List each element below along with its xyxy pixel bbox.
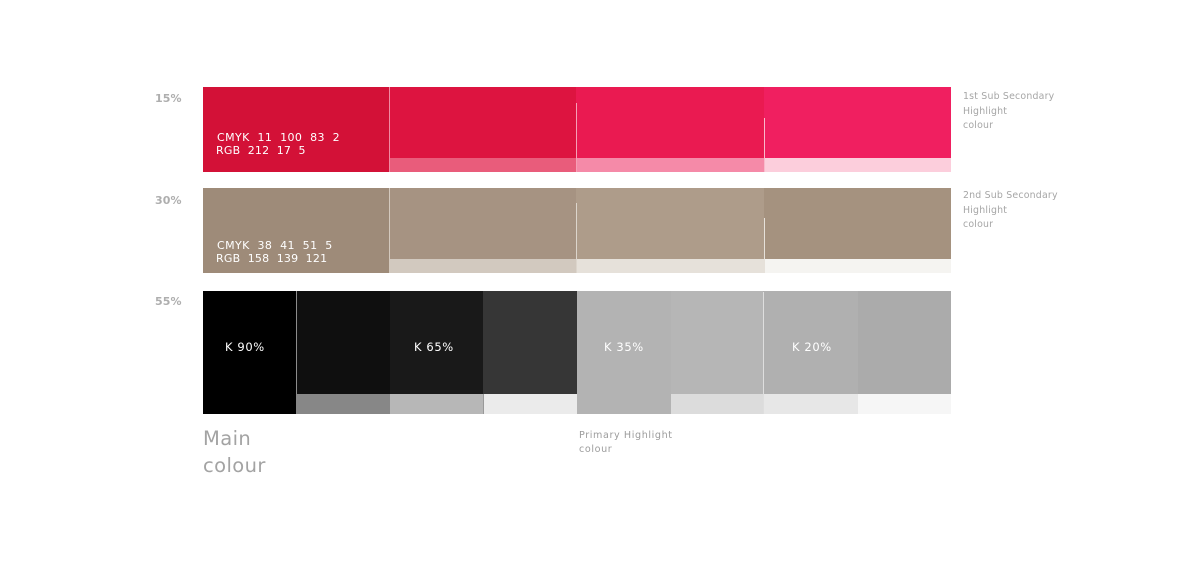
swatch: red tint 2 [576,87,764,172]
caption: 2nd sub secondary highlight colour: 2nd Sub Secondary [963,190,1058,201]
swatch: K 90% tint [296,291,390,394]
text: taupe RGB values: RGB 158 139 121 [216,252,327,265]
band: red light 3 [764,158,951,172]
band: taupe light 3 [764,259,951,273]
band: K 65% light [483,394,577,414]
band: K 20% mid [763,394,858,414]
swatch: K 35% tint [671,291,763,394]
swatch: K 65% [390,291,483,394]
text: taupe CMYK values: CMYK 38 41 51 5 [217,239,333,252]
heading: main colour: colour [203,454,266,477]
caption: 1st sub secondary highlight colour: colour [963,120,993,131]
label: 30%: 30% [155,194,182,207]
swatch: K 35% [577,291,671,414]
swatch: red tint 3 [764,87,951,172]
heading: main colour: Main [203,427,251,450]
caption: primary highlight colour [579,430,673,455]
band: K 20% light [858,394,951,414]
band: K 90% light [296,394,390,414]
panel: taupe swatch row [203,188,951,273]
label: 55%: 55% [155,295,182,308]
text: K 20%: K 20% [792,340,832,354]
caption: 2nd sub secondary highlight colour: Highlight [963,204,1007,216]
text: K 90%: K 90% [225,340,265,354]
text: red RGB values: RGB 212 17 5 [216,144,306,157]
band: K 35% light [671,394,763,414]
swatch: red tint 1 [389,87,576,172]
caption: 1st sub secondary highlight colour: 1st Sub Secondary [963,91,1054,102]
band: taupe light 1 [389,259,576,273]
swatch: K 90% [203,291,296,414]
panel: red swatch row [203,87,951,172]
caption: 2nd sub secondary highlight colour [963,190,1058,230]
label: 15%: 15% [155,92,182,105]
panel: greyscale swatch row [203,291,951,414]
band: K 65% mid [390,394,483,414]
swatch: taupe tint 2 [576,188,764,273]
band: red light 2 [576,158,764,172]
swatch: base taupe [203,188,389,273]
swatch: taupe tint 1 [389,188,576,273]
band: taupe light 2 [576,259,764,273]
heading: main colour [203,427,266,477]
swatch: K 20% tint [858,291,951,394]
caption: primary highlight colour: colour [579,444,612,455]
text: red CMYK values: CMYK 11 100 83 2 [217,131,340,144]
text: K 35%: K 35% [604,340,644,354]
caption: 1st sub secondary highlight colour: Highlight [963,106,1007,116]
text: K 65%: K 65% [414,340,454,354]
caption: primary highlight colour: Primary Highlight [579,430,673,441]
swatch: taupe tint 3 [764,188,951,273]
band: red light 1 [389,158,576,172]
swatch: K 20% [763,291,858,394]
caption: 1st sub secondary highlight colour [963,91,1054,131]
swatch: K 65% tint [483,291,577,394]
swatch: base red [203,87,389,172]
caption: 2nd sub secondary highlight colour: colour [963,219,993,230]
